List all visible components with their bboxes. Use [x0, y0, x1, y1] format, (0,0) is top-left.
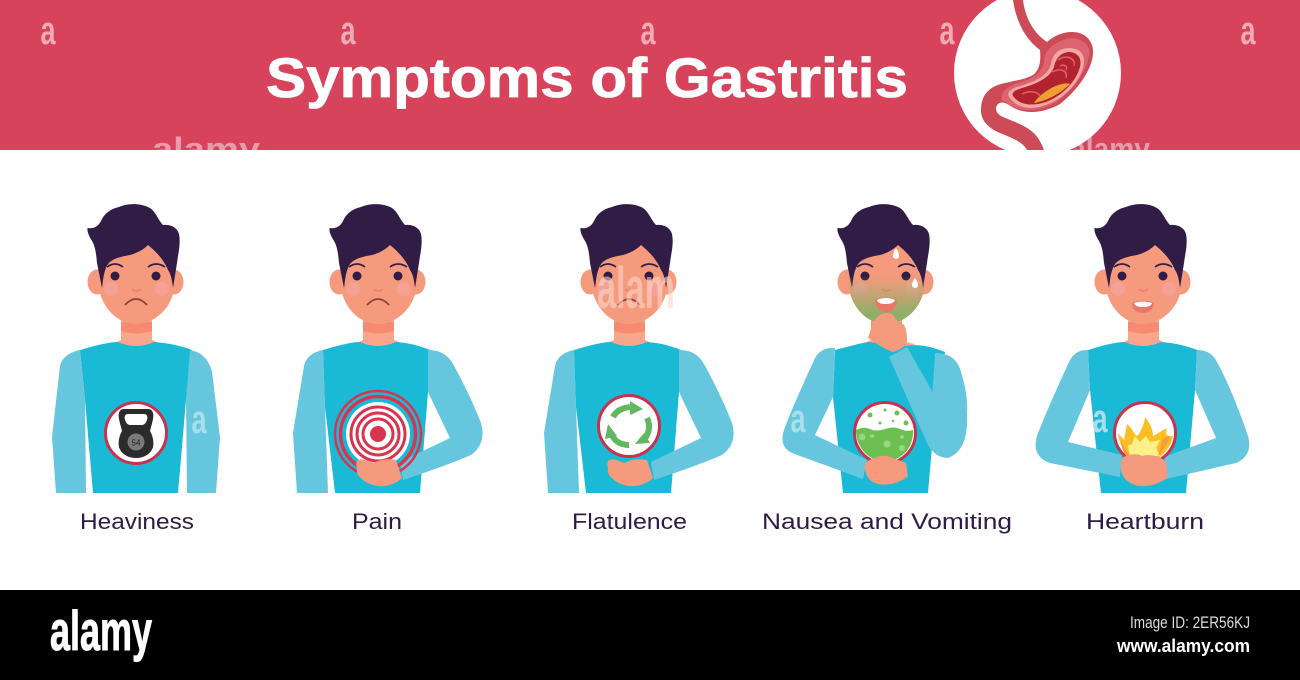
header watermarks: alamy — [1070, 131, 1150, 167]
label: pain: Pain — [352, 509, 402, 534]
head — [580, 204, 676, 350]
shirt torso — [80, 342, 192, 493]
raised forearm — [889, 347, 952, 457]
title: Symptoms of Gastritis — [266, 46, 908, 109]
sweat drops — [893, 248, 918, 288]
icon: stomach — [981, 0, 1093, 150]
icon: kettlebell: 54 — [132, 438, 141, 448]
label: nausea and vomiting: Nausea and Vomiting — [762, 509, 1012, 534]
raised hand — [868, 313, 907, 352]
hand — [607, 459, 653, 486]
header watermarks: a — [640, 9, 656, 53]
open mouth — [1132, 300, 1154, 313]
shirt torso — [574, 342, 681, 493]
head — [87, 204, 184, 350]
green face tint — [848, 255, 925, 324]
shirt torso — [323, 342, 430, 493]
frown — [367, 299, 389, 305]
header watermarks: a — [1240, 9, 1256, 53]
hand — [356, 459, 402, 486]
frown — [125, 299, 147, 305]
figure: heartburn — [1036, 204, 1249, 493]
hands — [1121, 454, 1168, 486]
open mouth — [875, 298, 897, 312]
figure: pain — [293, 204, 483, 493]
label: heartburn: Heartburn — [1086, 509, 1204, 534]
bent arm — [400, 350, 483, 480]
header watermarks: a — [40, 9, 56, 53]
icon: kettlebell — [106, 402, 166, 464]
figure: nausea and vomiting — [782, 204, 967, 493]
icon: flames — [1114, 402, 1176, 464]
sleeve watermark: a — [790, 397, 806, 441]
head — [837, 204, 934, 350]
header watermarks: a — [340, 9, 356, 53]
footer image id: Image ID: 2ER56KJ — [1130, 613, 1250, 632]
right sleeve — [186, 350, 220, 493]
footer url: www.alamy.com — [1116, 636, 1250, 656]
sleeve watermark: a — [1092, 397, 1108, 441]
icon: recycling gas arrows — [598, 396, 660, 456]
label: flatulence: Flatulence — [572, 509, 687, 534]
head — [329, 204, 426, 350]
hand — [865, 456, 908, 485]
bent arm — [651, 350, 734, 480]
left arm — [782, 348, 867, 479]
frown — [618, 299, 640, 305]
stomach emblem — [954, 0, 1121, 156]
icon: nausea bubbles — [854, 402, 916, 464]
raised upper arm — [926, 353, 967, 458]
left sleeve — [52, 350, 86, 493]
right arm — [1164, 350, 1249, 479]
head — [1094, 204, 1190, 350]
header watermarks: alamy — [152, 131, 260, 167]
header watermarks: a — [940, 9, 955, 53]
shirt torso — [833, 342, 945, 493]
header band — [0, 0, 1300, 150]
face watermark: alam — [597, 256, 675, 321]
footer logo: alamy — [50, 599, 152, 662]
shirt torso — [1088, 342, 1197, 493]
left sleeve — [293, 350, 328, 493]
figure: flatulence — [544, 204, 734, 493]
sleeve watermark: a — [192, 398, 207, 442]
footer bar — [0, 590, 1300, 680]
figure: heaviness — [52, 204, 220, 493]
icon: pain rings — [335, 391, 421, 477]
left arm — [1036, 350, 1122, 477]
band edge cover for watermarks — [0, 150, 1300, 175]
left sleeve — [544, 350, 579, 493]
label: heaviness: Heaviness — [80, 509, 194, 534]
header watermarks — [40, 9, 1256, 167]
